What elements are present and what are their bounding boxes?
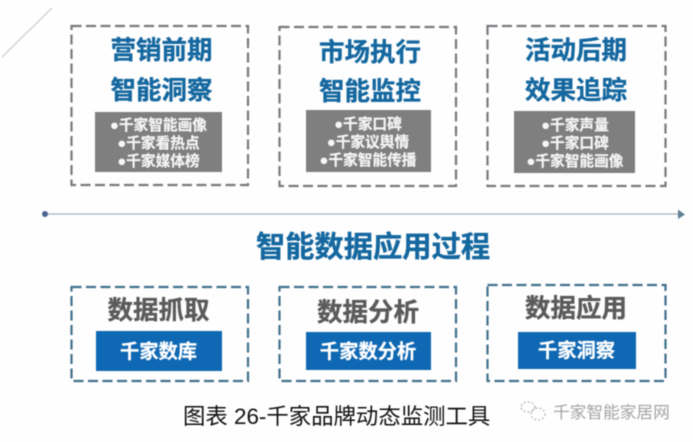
heading: 活动后期效果追踪: 效果追踪 — [525, 77, 627, 105]
tool list: 市场执行 — [306, 110, 431, 172]
tool list: 市场执行: ●千家口碑 — [334, 115, 402, 133]
tool button: 千家洞察 — [518, 332, 636, 369]
heading: 营销前期智能洞察: 智能洞察 — [110, 77, 213, 105]
tool list: 营销前期: ●千家智能画像 — [110, 116, 207, 134]
tool list: 活动后期: ●千家智能画像 — [526, 152, 624, 170]
heading: 活动后期效果追踪 — [525, 37, 627, 105]
tool list: 活动后期: ●千家声量 — [541, 116, 609, 134]
panel: 数据抓取 — [72, 287, 248, 381]
tool list: 市场执行: ●千家议舆情 — [327, 133, 409, 151]
tool list: 活动后期 — [514, 111, 635, 173]
heading: 市场执行智能监控: 智能监控 — [319, 78, 421, 106]
tool button: 千家数库: 千家数库 — [120, 340, 197, 363]
tool list: 营销前期: ●千家看热点 — [117, 134, 200, 152]
tool button: 千家数分析: 千家数分析 — [320, 340, 416, 363]
tool button: 千家数库 — [96, 331, 222, 371]
title: 智能数据应用过程: 智能数据应用过程 — [256, 231, 490, 264]
panel: 活动后期效果追踪 — [488, 26, 666, 186]
tool button: 千家数分析 — [306, 332, 431, 370]
heading: 活动后期效果追踪: 活动后期 — [525, 37, 627, 65]
icon: chat bubbles watermark — [521, 402, 545, 420]
heading: 营销前期智能洞察: 营销前期 — [110, 37, 213, 65]
tool button: 千家洞察: 千家洞察 — [538, 339, 615, 362]
arrow: process timeline — [42, 210, 685, 219]
tool list: 活动后期: ●千家口碑 — [541, 134, 609, 152]
label: 数据应用: 数据应用 — [525, 294, 627, 323]
panel: 数据应用 — [488, 285, 666, 381]
heading: 营销前期智能洞察 — [110, 37, 213, 105]
panel: 数据分析 — [280, 287, 456, 381]
label: 数据抓取: 数据抓取 — [107, 297, 210, 325]
heading: 市场执行智能监控: 市场执行 — [319, 39, 421, 67]
panel: 营销前期智能洞察 — [72, 26, 248, 185]
caption: 图表 26: 图表 26-千家品牌动态监测工具 — [183, 404, 490, 429]
panel: 市场执行智能监控 — [280, 27, 456, 186]
label: 数据分析: 数据分析 — [317, 299, 419, 327]
tool list: 营销前期: ●千家媒体榜 — [117, 152, 200, 170]
tool list: 市场执行: ●千家智能传播 — [320, 151, 417, 169]
watermark text: 千家智能家居网 — [553, 403, 670, 422]
tool list: 营销前期 — [95, 112, 222, 172]
heading: 市场执行智能监控 — [319, 39, 421, 106]
